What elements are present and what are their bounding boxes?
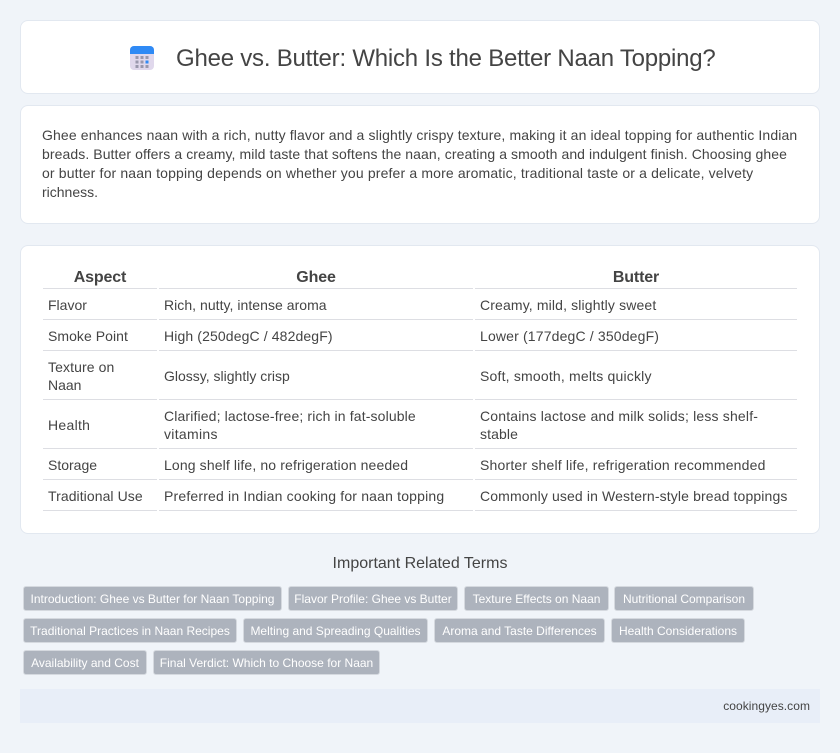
table header row <box>43 269 797 289</box>
row: health: Health <box>48 417 90 433</box>
panel: introduction text: richness. <box>42 184 98 200</box>
row: traditional use: Traditional Use <box>48 488 143 504</box>
tag <box>153 650 380 675</box>
footer source text: cookingyes.com <box>723 699 810 713</box>
row: smoke point: Smoke Point <box>48 328 128 344</box>
row: storage: Long shelf life, no refrigeration needed <box>164 457 408 473</box>
row: health: vitamins <box>164 426 218 442</box>
table header row: Butter <box>613 269 659 286</box>
tag <box>23 650 147 675</box>
tag: Availability and Cost <box>31 656 139 670</box>
row: texture on naan: Glossy, slightly crisp <box>164 368 290 384</box>
tag <box>434 618 605 643</box>
tag <box>464 586 609 611</box>
row: texture on naan: Texture on <box>48 359 114 375</box>
row: storage: Storage <box>48 457 97 473</box>
tag: Traditional Practices in Naan Recipes <box>30 624 230 638</box>
title: Ghee vs. Butter: Which Is the Better Naan Topping? <box>176 45 716 72</box>
row: flavor: Flavor <box>48 297 87 313</box>
tag: Aroma and Taste Differences <box>442 624 597 638</box>
heading: important related terms: Important Related Terms <box>333 555 507 572</box>
tag: Melting and Spreading Qualities <box>250 624 421 638</box>
footer bar <box>20 689 820 723</box>
header panel <box>20 20 820 94</box>
row: texture on naan: Naan <box>48 377 81 393</box>
row: storage: Shorter shelf life, refrigeration recommended <box>480 457 766 473</box>
tag <box>23 586 282 611</box>
row: traditional use <box>43 488 797 511</box>
table header row: Ghee <box>296 269 336 286</box>
tag <box>23 618 237 643</box>
row: traditional use: Commonly used in Western-style bread toppings <box>480 488 788 504</box>
tag: Health Considerations <box>619 624 737 638</box>
row: health: Clarified; lactose-free; rich in fat-soluble <box>164 408 416 424</box>
tag: Flavor Profile: Ghee vs Butter <box>294 592 452 606</box>
panel: introduction text: or butter for naan topping depends on whether you prefer a more aromatic, traditional taste or a delicate, velvety <box>42 165 753 181</box>
panel: introduction text: Ghee enhances naan with a rich, nutty flavor and a slightly crispy texture, making it an ideal topping for authentic Indian <box>42 127 797 143</box>
row: storage <box>43 457 797 480</box>
tag <box>614 586 754 611</box>
row: smoke point: High (250degC / 482degF) <box>164 328 333 344</box>
row: smoke point: Lower (177degC / 350degF) <box>480 328 659 344</box>
row: flavor: Rich, nutty, intense aroma <box>164 297 327 313</box>
panel: introduction text <box>20 105 820 224</box>
tag: Texture Effects on Naan <box>473 592 600 606</box>
panel: introduction text: breads. Butter offers a creamy, mild taste that softens the naan, creating a smooth and indulgent finish. Choosing ghee <box>42 146 787 162</box>
tag: Nutritional Comparison <box>623 592 745 606</box>
row: traditional use: Preferred in Indian cooking for naan topping <box>164 488 444 504</box>
row: flavor: Creamy, mild, slightly sweet <box>480 297 656 313</box>
tag: Introduction: Ghee vs Butter for Naan Topping <box>31 592 274 606</box>
row: health <box>43 408 797 449</box>
table header row: Aspect <box>74 269 126 286</box>
row: smoke point <box>43 328 797 351</box>
icon: calendar grid <box>130 46 154 70</box>
row: texture on naan <box>43 359 797 400</box>
tag list <box>23 586 754 675</box>
tag: Final Verdict: Which to Choose for Naan <box>160 656 373 670</box>
row: texture on naan: Soft, smooth, melts quickly <box>480 368 652 384</box>
tag <box>288 586 458 611</box>
tag <box>611 618 745 643</box>
row: flavor <box>43 297 797 320</box>
panel: comparison table <box>20 245 820 534</box>
row: health: stable <box>480 426 518 442</box>
row: health: Contains lactose and milk solids; less shelf- <box>480 408 758 424</box>
tag <box>243 618 428 643</box>
